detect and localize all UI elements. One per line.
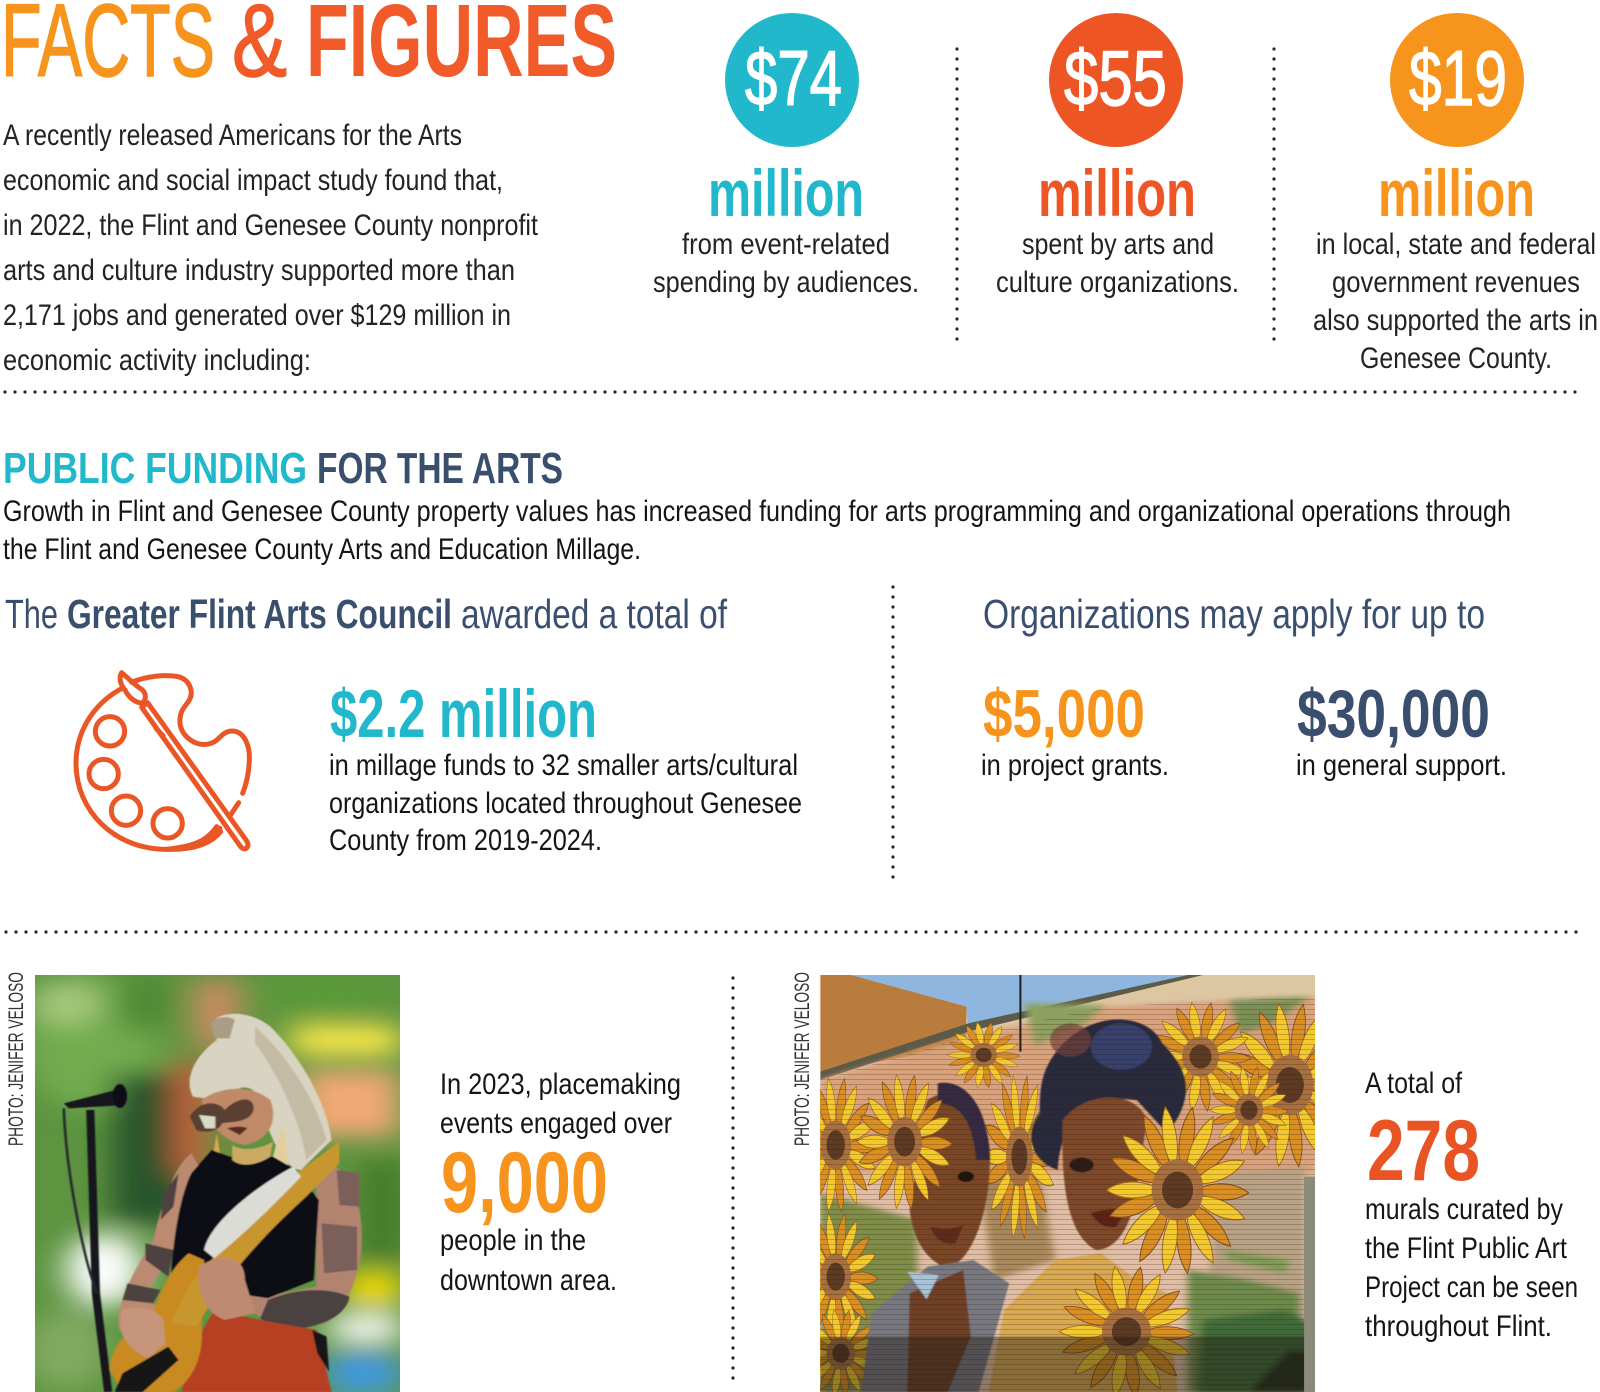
funding paragraph: the Flint and Genesee County Arts and Education Millage. bbox=[3, 533, 641, 566]
stat: $5,000 bbox=[981, 676, 1169, 782]
sky bbox=[852, 975, 1186, 1024]
stat: $74 million: spending by audiences. bbox=[653, 266, 919, 299]
public funding panel bbox=[3, 444, 1511, 857]
photo: guitarist bbox=[26, 973, 400, 1392]
stat: $30,000: in general support. bbox=[1296, 749, 1507, 782]
stat: $5,000: in project grants. bbox=[981, 749, 1169, 782]
placemaking text block: 9,000 bbox=[441, 1135, 608, 1231]
placemaking text block bbox=[440, 1068, 681, 1297]
stat: $2.2 million: $2.2 million bbox=[330, 676, 597, 752]
funding paragraph bbox=[3, 495, 1511, 566]
murals text block: A total of bbox=[1365, 1067, 1463, 1100]
stat: $74 million: million bbox=[708, 156, 864, 230]
intro text block: economic and social impact study found that, bbox=[3, 164, 503, 197]
girl bbox=[989, 1019, 1186, 1392]
stat: $55 million: spent by arts and bbox=[1022, 228, 1214, 261]
arts council heading: awarded a total of bbox=[461, 591, 727, 637]
brick building bbox=[820, 975, 966, 1072]
guitar body bbox=[110, 1253, 204, 1392]
section heading: PUBLIC FUNDING bbox=[3, 444, 307, 493]
photo credit left: PHOTO: JENIFER VELOSO bbox=[5, 972, 28, 1146]
stat: $74 million: from event-related bbox=[682, 228, 890, 261]
brick lines bbox=[820, 997, 1316, 1392]
stat: $55 million: culture organizations. bbox=[996, 266, 1239, 299]
placemaking text block: downtown area. bbox=[440, 1264, 617, 1297]
boy bbox=[861, 1083, 1009, 1392]
intro text block: in 2022, the Flint and Genesee County nonprofit bbox=[3, 209, 539, 242]
hair bbox=[189, 1014, 332, 1170]
stat: $19 million: $19 bbox=[1409, 34, 1507, 122]
icon: paint palette and brush bbox=[76, 673, 249, 849]
stat: $30,000: $30,000 bbox=[1297, 676, 1490, 752]
arts council heading: The bbox=[5, 591, 58, 637]
stat: $74 million bbox=[653, 13, 919, 299]
murals text block: the Flint Public Art bbox=[1365, 1232, 1568, 1265]
necklace bbox=[232, 1142, 273, 1165]
arms bbox=[118, 1153, 199, 1352]
intro text block: A recently released Americans for the Arts bbox=[3, 119, 462, 152]
skirt bbox=[181, 1310, 332, 1392]
intro text block: economic activity including: bbox=[3, 344, 311, 377]
strap bbox=[204, 1167, 301, 1258]
top of wall bbox=[974, 975, 1315, 1032]
stat: $19 million bbox=[1313, 13, 1598, 375]
section heading: FOR THE ARTS bbox=[317, 444, 563, 493]
stat: $2.2 million bbox=[329, 676, 802, 857]
placemaking text block: people in the bbox=[440, 1224, 586, 1257]
bottom shadow bbox=[820, 1337, 1316, 1392]
sunflowers bbox=[947, 1022, 1020, 1088]
stat: $5,000: $5,000 bbox=[983, 676, 1145, 752]
stat: $55 million: $55 bbox=[1064, 34, 1167, 122]
murals text block: murals curated by bbox=[1365, 1193, 1563, 1226]
hands bbox=[199, 1258, 255, 1320]
stat: $74 million: $74 bbox=[745, 34, 842, 122]
placemaking text block: events engaged over bbox=[440, 1107, 672, 1140]
stat: $55 million: million bbox=[1038, 156, 1196, 230]
placemaking text block: In 2023, placemaking bbox=[440, 1068, 681, 1101]
murals text block: throughout Flint. bbox=[1365, 1310, 1552, 1343]
header panel bbox=[1, 0, 1598, 377]
section heading bbox=[3, 444, 563, 493]
stat: $2.2 million: organizations located throughout Genesee bbox=[329, 787, 802, 820]
black top bbox=[171, 1150, 319, 1298]
murals text block bbox=[1365, 1067, 1578, 1343]
murals text block: 278 bbox=[1367, 1103, 1480, 1199]
intro text block bbox=[3, 119, 539, 377]
title bbox=[1, 0, 617, 98]
earrings bbox=[212, 1134, 222, 1154]
organizations heading: Organizations may apply for up to bbox=[983, 591, 1485, 637]
mic and stand bbox=[64, 1088, 125, 1108]
stat: $30,000 bbox=[1296, 676, 1507, 782]
photo credit right: PHOTO: JENIFER VELOSO bbox=[791, 972, 814, 1146]
arts council heading: Greater Flint Arts Council bbox=[67, 591, 452, 637]
stat: $19 million: million bbox=[1378, 156, 1535, 230]
intro text block: arts and culture industry supported more than bbox=[3, 254, 515, 287]
photo: sunflower mural bbox=[820, 975, 1315, 1392]
stat: $55 million bbox=[996, 13, 1239, 299]
arts council heading bbox=[5, 591, 727, 637]
intro text block: 2,171 jobs and generated over $129 million in bbox=[3, 299, 511, 332]
guitar neck bbox=[171, 1142, 339, 1327]
face bbox=[202, 1089, 273, 1145]
stat: $2.2 million: in millage funds to 32 smaller arts/cultural bbox=[329, 749, 798, 782]
stat: $2.2 million: County from 2019-2024. bbox=[329, 824, 602, 857]
stat: $19 million: Genesee County. bbox=[1360, 342, 1552, 375]
